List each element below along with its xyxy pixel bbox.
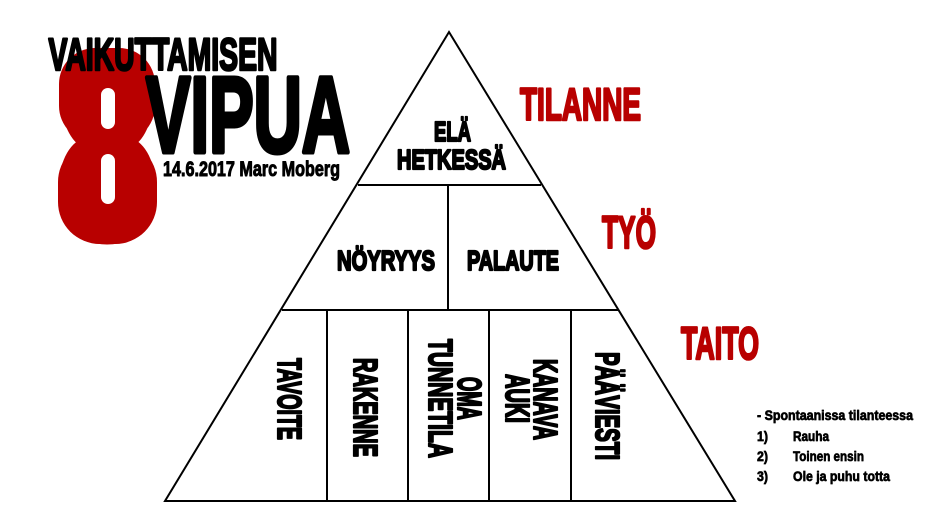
bottom tier label: KANAVA AUKI: AUKI xyxy=(499,374,536,423)
list item 3: 3) xyxy=(757,468,768,484)
title: VIPUA: VIPUA xyxy=(146,54,350,175)
top tier label: ELÄ HETKESSÄ xyxy=(397,116,506,175)
tier dividers xyxy=(282,185,618,501)
bottom tier label: OMA TUNNETILA: TUNNETILA xyxy=(422,339,459,458)
list item 2: Toinen ensin xyxy=(793,448,864,464)
list item 3 xyxy=(757,468,890,484)
list item 1: 1) xyxy=(757,428,768,444)
bottom tier label: RAKENNE: RAKENNE xyxy=(347,358,384,457)
title: VAIKUTTAMISEN: VAIKUTTAMISEN xyxy=(48,29,278,80)
big red number 8: 8 xyxy=(58,5,156,290)
level label: TAITO: TAITO xyxy=(681,318,759,369)
bottom tier label: KANAVA AUKI: KANAVA xyxy=(527,359,564,440)
note heading: - Spontaanissa tilanteessa xyxy=(757,407,913,423)
bottom tier label: OMA TUNNETILA: OMA xyxy=(451,377,488,420)
date and author: 14.6.2017 Marc Moberg xyxy=(163,158,340,181)
pyramid diagram xyxy=(165,32,735,501)
bottom tier label: PÄÄVIESTI: PÄÄVIESTI xyxy=(589,352,626,460)
list item 3: Ole ja puhu totta xyxy=(793,468,890,484)
level label: TYÖ: TYÖ xyxy=(602,207,656,258)
list item 2: 2) xyxy=(757,448,768,464)
middle tier label: NÖYRYYS: NÖYRYYS xyxy=(337,245,435,276)
bottom tier label: KANAVA AUKI xyxy=(499,359,564,440)
top tier label: ELÄ HETKESSÄ: HETKESSÄ xyxy=(397,144,506,175)
list item 2 xyxy=(757,448,864,464)
list item 1 xyxy=(757,428,829,444)
level label: TILANNE: TILANNE xyxy=(520,79,641,130)
bottom tier label: OMA TUNNETILA xyxy=(422,339,488,458)
middle tier label: PALAUTE: PALAUTE xyxy=(467,245,559,276)
note list xyxy=(757,407,913,484)
bottom tier label: TAVOITE: TAVOITE xyxy=(271,358,308,440)
list item 1: Rauha xyxy=(793,428,829,444)
big red number 8 xyxy=(58,5,157,290)
pyramid outline xyxy=(165,32,735,501)
top tier label: ELÄ HETKESSÄ: ELÄ xyxy=(434,116,471,147)
